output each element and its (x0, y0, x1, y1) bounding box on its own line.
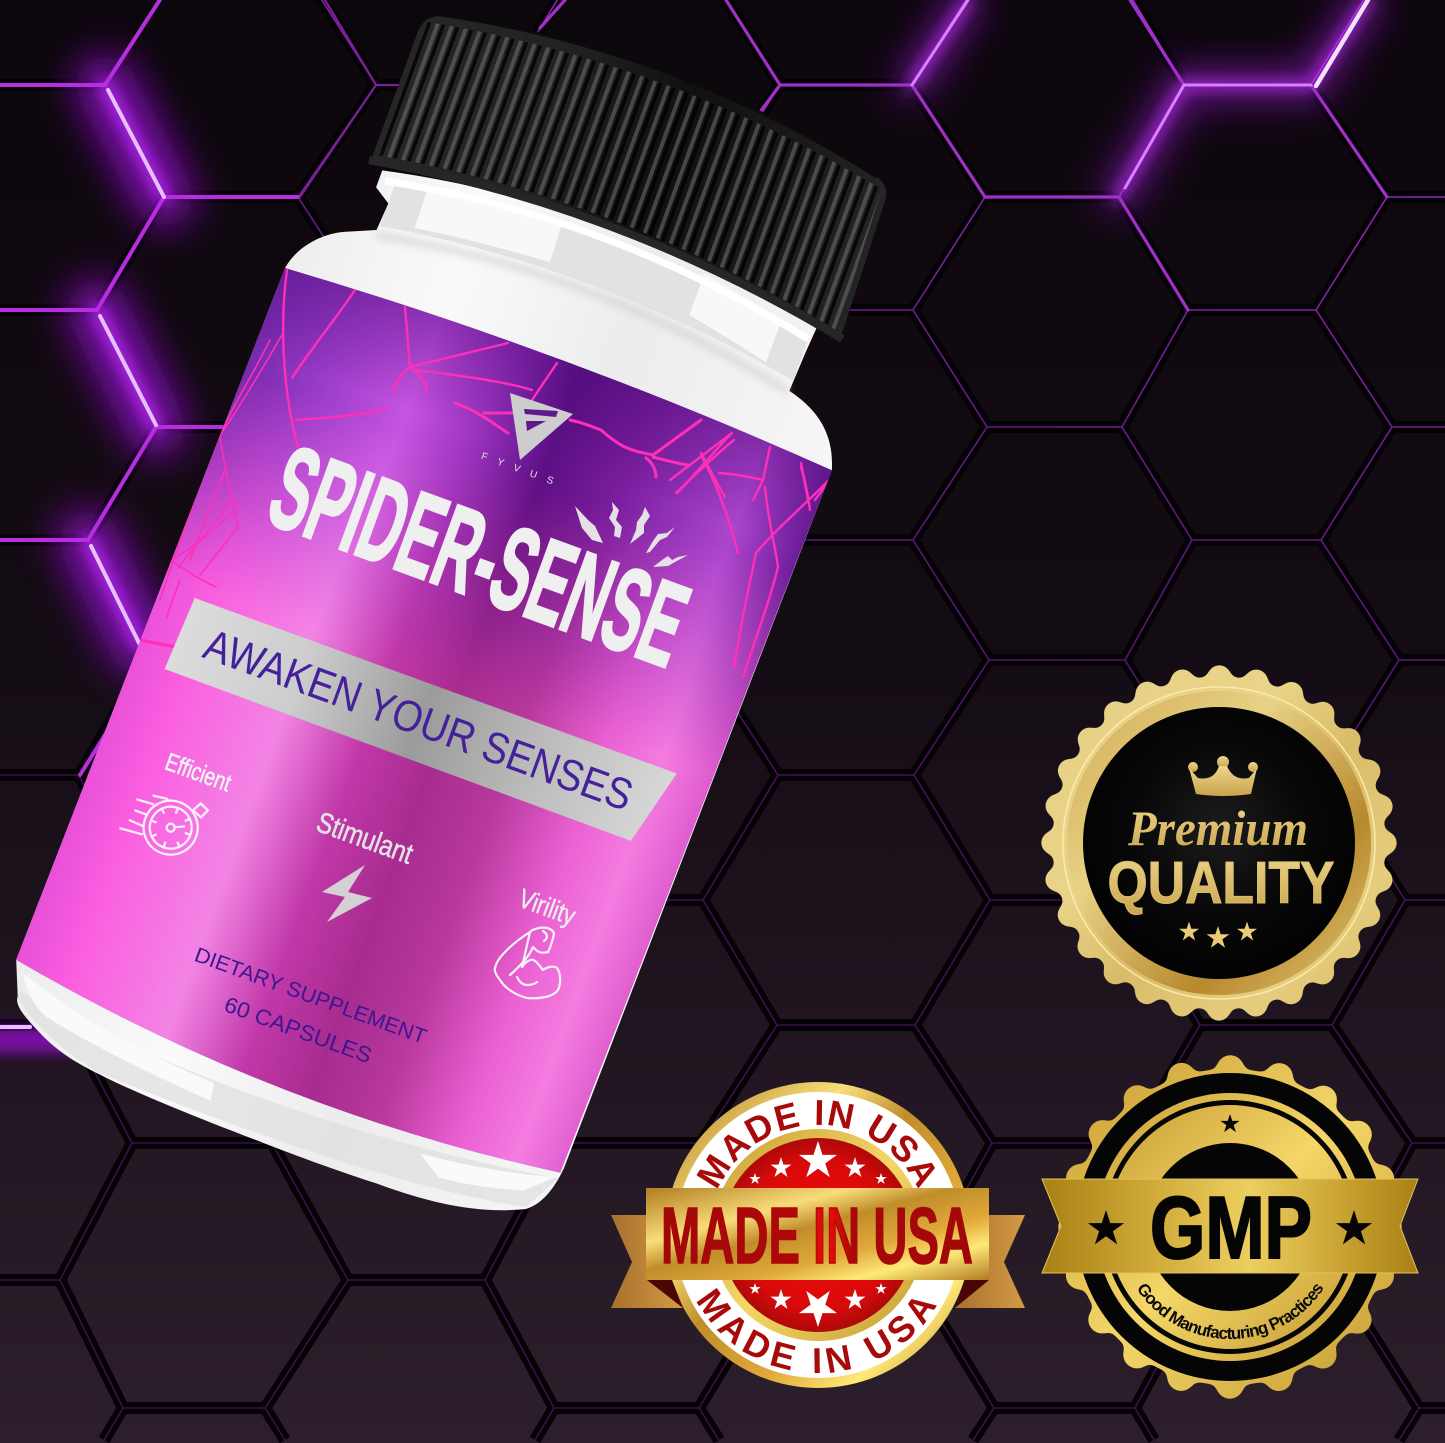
purple label (6, 255, 836, 1193)
ring text top: MADE IN USA (696, 1100, 935, 1188)
icon: lightning bolt (322, 865, 372, 922)
neon glow: left hexagon edges (0, 0, 398, 1040)
icon: spider sense lightning marks (575, 502, 688, 567)
ribbon band (646, 1188, 989, 1280)
label text (60, 374, 758, 1133)
product bottle (0, 0, 908, 1247)
icon: muscle arm (495, 928, 560, 998)
ribbon tails (611, 1215, 1025, 1308)
badge: made in usa (611, 1082, 1025, 1388)
ribbon text: MADE IN USA (661, 1191, 973, 1280)
badge: premium quality (1053, 677, 1385, 1009)
top star (1220, 1114, 1240, 1132)
ring text bottom: MADE IN USA (696, 1288, 937, 1374)
scalloped gold edge (1072, 1069, 1388, 1385)
gmp arc text: Good Manufacturing Practices (1138, 1284, 1323, 1340)
capsule count: 60 CAPSULES (221, 992, 375, 1068)
three stars (1179, 922, 1257, 948)
product name: SPIDER-SENSE (254, 421, 704, 692)
benefit label: virility: Virility (515, 883, 580, 931)
dietary supplement text: DIETARY SUPPLEMENT (191, 943, 430, 1049)
premium script: Premium (1127, 800, 1308, 856)
quality wordmark: QUALITY (1108, 850, 1334, 916)
neon glow: top right hexagon edges (540, 0, 1387, 310)
stars (749, 1141, 887, 1327)
gmp wordmark: GMP (1150, 1178, 1312, 1277)
benefit label: stimulant: Stimulant (312, 807, 417, 871)
gmp ribbon (1042, 1179, 1418, 1273)
spider web lines on label (140, 270, 832, 677)
tagline banner: AWAKEN YOUR SENSES (198, 620, 639, 821)
bottle cap (366, 0, 908, 342)
icon: brand logo triangle (510, 393, 573, 460)
benefit label: efficient: Efficient (161, 748, 235, 798)
scalloped gold edge (1053, 677, 1385, 1009)
brand name: FYVUS (480, 451, 555, 487)
bottle body (0, 122, 884, 1247)
ribbon stars (1088, 1210, 1372, 1244)
icon: stopwatch (116, 780, 209, 863)
icon: crown (1188, 756, 1258, 796)
badge: gmp (1041, 1055, 1419, 1399)
ribbon fold shadows (647, 1280, 989, 1308)
